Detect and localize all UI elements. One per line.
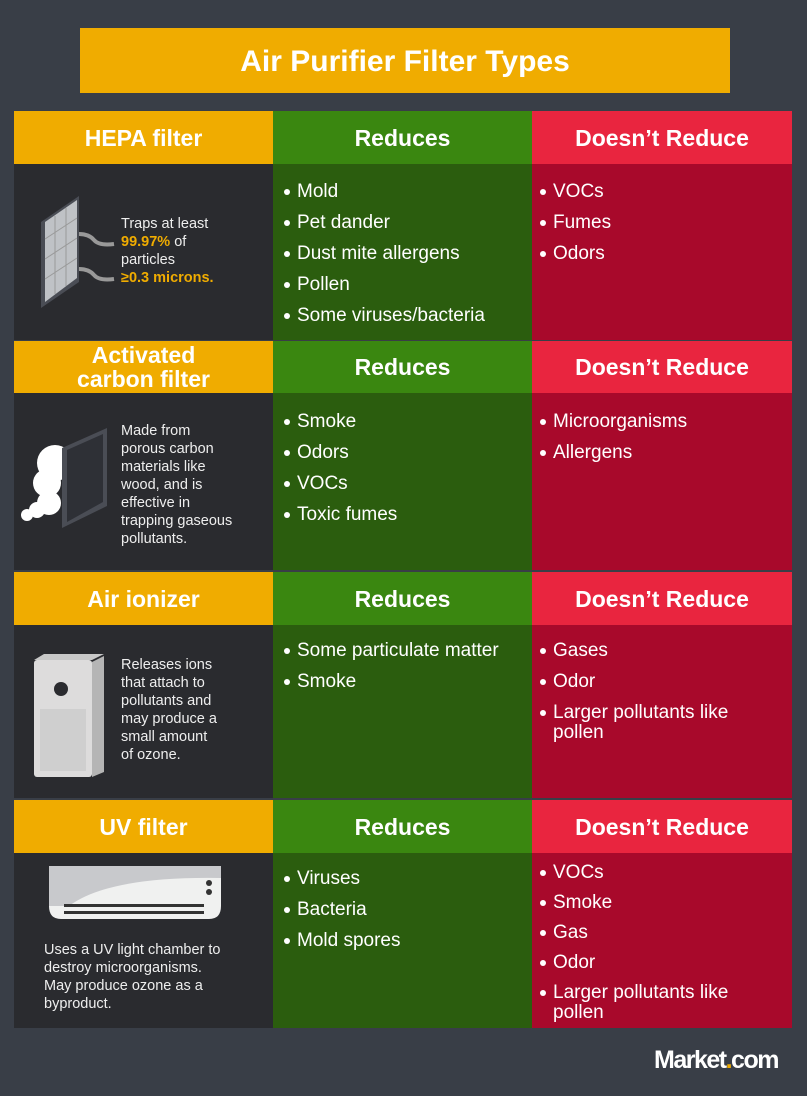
list: reduces: VOCs <box>297 473 348 494</box>
list: doesn't reduce <box>532 853 792 1028</box>
list: doesn't reduce <box>532 625 792 798</box>
heading: reduces <box>273 800 532 853</box>
heading: HEPA filter: HEPA filter <box>85 124 202 150</box>
text: HEPA description: particles <box>121 252 175 268</box>
list: doesn't reduce <box>532 164 792 340</box>
panel: UV filter row <box>14 800 792 1028</box>
text: ionizer description: may produce a <box>121 711 217 727</box>
icon: carbon filter with smoke <box>21 428 107 528</box>
text: carbon description <box>121 423 232 547</box>
list: doesn't reduce: Larger pollutants like pollen <box>553 982 728 1023</box>
list: reduces <box>273 164 532 340</box>
text: carbon description: trapping gaseous <box>121 513 232 529</box>
heading: UV filter: UV filter <box>99 814 188 840</box>
text: carbon description: porous carbon <box>121 441 214 457</box>
heading: doesn't reduce <box>532 111 792 164</box>
heading: reduces: Reduces <box>355 354 450 380</box>
list: doesn't reduce: Odor <box>553 671 595 692</box>
heading: reduces: Reduces <box>355 586 450 612</box>
heading: reduces <box>273 111 532 164</box>
list: doesn't reduce: VOCs <box>553 181 604 202</box>
heading: reduces: Reduces <box>355 124 450 150</box>
text: carbon description: pollutants. <box>121 531 187 547</box>
body cell: description <box>14 393 273 570</box>
list: reduces: Smoke <box>297 411 356 432</box>
list: reduces: Bacteria <box>297 899 367 920</box>
title: Air Purifier Filter Types <box>240 44 570 78</box>
list: doesn't reduce: Microorganisms <box>553 411 687 432</box>
list: doesn't reduce: Fumes <box>553 212 611 233</box>
heading: doesn't reduce: Doesn’t Reduce <box>575 124 749 150</box>
list: doesn't reduce: Odors <box>553 243 605 264</box>
heading: doesn't reduce <box>532 800 792 853</box>
heading: reduces <box>273 341 532 393</box>
text: ionizer description: Releases ions <box>121 657 212 673</box>
list: doesn't reduce <box>532 393 792 570</box>
text: carbon description: materials like <box>121 459 206 475</box>
heading: air ionizer: Air ionizer <box>87 586 200 612</box>
logo: Market.com: Market.com <box>654 1046 778 1074</box>
text: HEPA description <box>121 216 214 286</box>
list: reduces: Some particulate matter <box>297 640 499 661</box>
icon: HEPA filter panel <box>41 196 114 308</box>
list: doesn't reduce: Allergens <box>553 442 632 463</box>
text: carbon description: wood, and is <box>121 477 202 493</box>
list: reduces: Mold spores <box>297 930 400 951</box>
panel: Activated carbon row <box>14 341 792 570</box>
list: doesn't reduce: Gas <box>553 922 588 943</box>
text: carbon description: effective in <box>121 495 190 511</box>
list: reduces: Some viruses/bacteria <box>297 305 485 326</box>
text: carbon description: Made from <box>121 423 190 439</box>
list: reduces <box>273 625 532 798</box>
heading: reduces: Reduces <box>355 814 450 840</box>
text: ionizer description: that attach to <box>121 675 205 691</box>
panel: Air ionizer row <box>14 572 792 798</box>
list: reduces: Odors <box>297 442 349 463</box>
list: doesn't reduce: Larger pollutants like pollen <box>553 702 728 743</box>
heading: HEPA filter <box>14 111 273 164</box>
list: doesn't reduce: Smoke <box>553 892 612 913</box>
title <box>80 28 730 93</box>
text: HEPA description: 99.97% of <box>121 234 186 250</box>
text: HEPA description: Traps at least <box>121 216 208 232</box>
list: reduces: Dust mite allergens <box>297 243 460 264</box>
text: ionizer description: pollutants and <box>121 693 211 709</box>
text: ionizer description <box>121 657 217 763</box>
heading: doesn't reduce <box>532 341 792 393</box>
body cell: description <box>14 164 273 340</box>
icon: UV unit <box>49 866 221 919</box>
heading: doesn't reduce: Doesn’t Reduce <box>575 814 749 840</box>
list: doesn't reduce: Gases <box>553 640 608 661</box>
text: UV description: Uses a UV light chamber to <box>44 942 220 958</box>
icon: air purifier unit <box>34 654 104 777</box>
heading: UV filter <box>14 800 273 853</box>
body cell: description <box>14 853 273 1028</box>
text: UV description: destroy microorganisms. <box>44 960 202 976</box>
heading: activated carbon: Activated <box>92 342 195 368</box>
text: ionizer description: of ozone. <box>121 747 181 763</box>
panel: HEPA filter row <box>14 111 792 340</box>
list: reduces: Toxic fumes <box>297 504 397 525</box>
heading: air ionizer <box>14 572 273 625</box>
list: doesn't reduce: Odor <box>553 952 595 973</box>
body cell: description <box>14 625 273 798</box>
list: reduces: Smoke <box>297 671 356 692</box>
text: ionizer description: small amount <box>121 729 207 745</box>
list: reduces <box>273 393 532 570</box>
heading: reduces <box>273 572 532 625</box>
heading: doesn't reduce: Doesn’t Reduce <box>575 586 749 612</box>
text: HEPA description: ≥0.3 microns. <box>121 270 214 286</box>
list: reduces: Mold <box>297 181 338 202</box>
text: UV description: byproduct. <box>44 996 112 1012</box>
list: reduces: Viruses <box>297 868 360 889</box>
heading: activated carbon: carbon filter <box>77 366 210 392</box>
heading: doesn't reduce <box>532 572 792 625</box>
text: UV description: May produce ozone as a <box>44 978 203 994</box>
heading: doesn't reduce: Doesn’t Reduce <box>575 354 749 380</box>
list: reduces: Pet dander <box>297 212 390 233</box>
heading: activated carbon <box>14 341 273 393</box>
list: doesn't reduce: VOCs <box>553 862 604 883</box>
list: reduces: Pollen <box>297 274 350 295</box>
list: reduces <box>273 853 532 1028</box>
text: UV description <box>44 942 220 1012</box>
